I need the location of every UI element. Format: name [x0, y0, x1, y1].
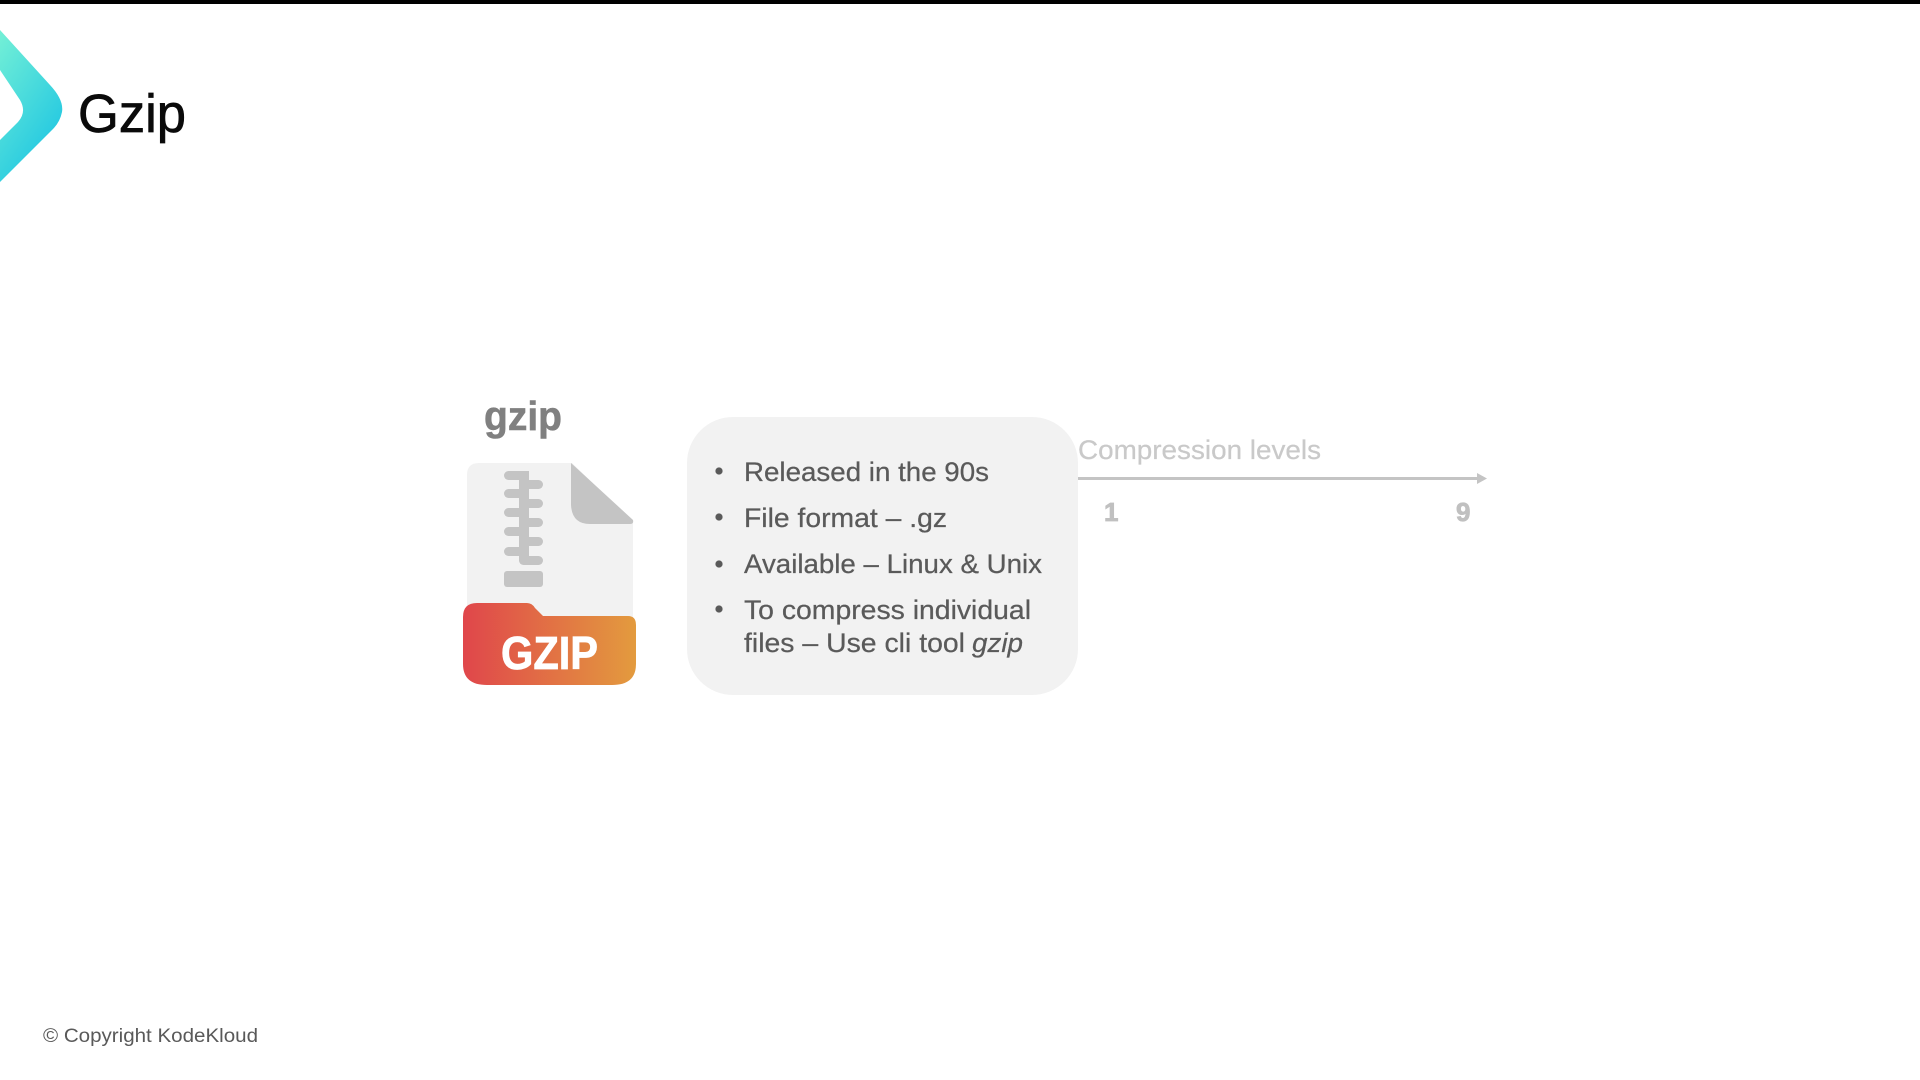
file fold — [571, 463, 633, 524]
bullet list: To compress individual — [744, 595, 1031, 625]
file page — [467, 463, 633, 620]
bullet list — [716, 457, 1043, 658]
top bar — [0, 0, 1920, 4]
compression levels label: Compression levels — [1078, 435, 1321, 465]
folder label: GZIP — [501, 627, 598, 679]
bullet list: Released in the 90s — [744, 457, 989, 487]
icon: logo chevron — [0, 30, 62, 182]
folder band — [463, 603, 636, 685]
level 9: 9 — [1456, 497, 1470, 527]
copyright: © Copyright KodeKloud — [43, 1025, 258, 1047]
heading: gzip: gzip — [484, 393, 562, 439]
level 1: 1 — [1104, 497, 1118, 527]
bullet list: File format – .gz — [744, 503, 947, 533]
bullet list: Available – Linux & Unix — [744, 549, 1043, 579]
icon: gzip file — [463, 463, 636, 685]
bullet list: files – Use cli tool — [744, 628, 965, 658]
zipper — [504, 471, 543, 587]
bullet list: gzip — [972, 628, 1023, 658]
arrow: compression scale — [1078, 473, 1487, 484]
panel: gzip facts — [687, 417, 1078, 695]
title: Gzip — [78, 84, 186, 144]
